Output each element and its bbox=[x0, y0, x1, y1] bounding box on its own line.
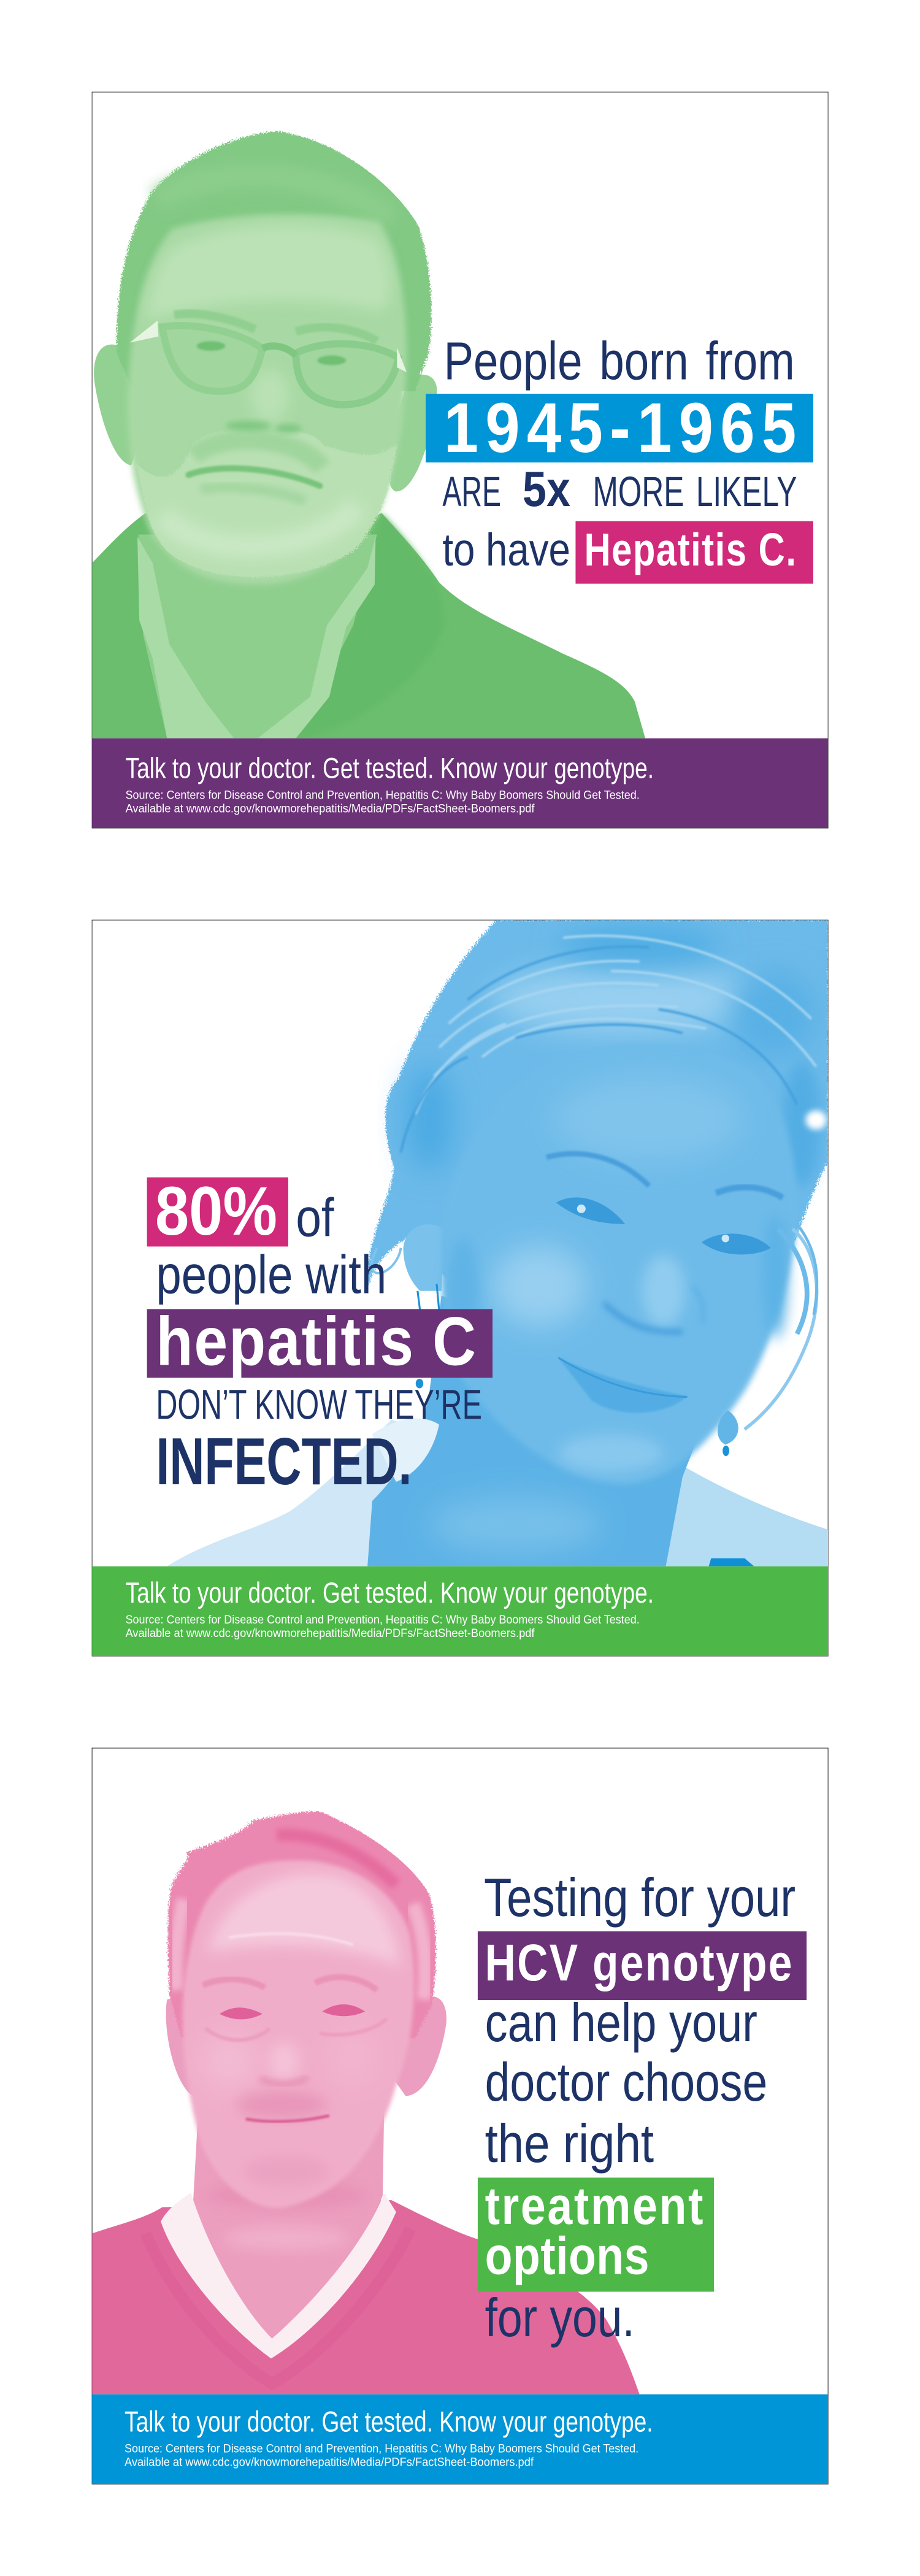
banner: purple call to action: Source: Centers for Disease Control and Prevention, Hepatitis C: Why Baby Boomers Should Get Tested. bbox=[126, 789, 640, 802]
headline text: 5x bbox=[523, 462, 570, 517]
pink highlight: Hepatitis C.: Hepatitis C. bbox=[584, 525, 796, 576]
banner: purple call to action bbox=[92, 738, 828, 828]
banner: purple call to action: Available at www.cdc.gov/knowmorehepatitis/Media/PDFs/FactSheet-Boomers.pdf bbox=[126, 802, 535, 815]
headline text: people with bbox=[156, 1244, 386, 1305]
headline text: People born from bbox=[444, 332, 795, 391]
headline text: of bbox=[296, 1187, 334, 1248]
headline text bbox=[426, 332, 813, 584]
headline text bbox=[478, 1867, 807, 2348]
blue highlight: 1945-1965: 1945-1965 bbox=[444, 388, 796, 467]
headline text bbox=[147, 1173, 493, 1499]
purple highlight: HCV genotype: HCV genotype bbox=[485, 1934, 792, 1992]
headline text: the right bbox=[485, 2113, 654, 2174]
panel: born 1945-1965 bbox=[92, 92, 828, 828]
headline text: doctor choose bbox=[485, 2052, 767, 2112]
banner: blue call to action: Talk to your doctor. Get tested. Know your genotype. bbox=[125, 2405, 653, 2438]
panel: 80 percent unaware bbox=[92, 920, 828, 1656]
banner: green call to action: Available at www.cdc.gov/knowmorehepatitis/Media/PDFs/FactSheet-Boomers.pdf bbox=[126, 1627, 535, 1640]
pink highlight: 80%: 80% bbox=[155, 1173, 277, 1249]
green highlight: treatment options: options bbox=[485, 2226, 649, 2285]
green highlight: treatment options: treatment bbox=[485, 2175, 703, 2235]
headline text: INFECTED. bbox=[156, 1424, 412, 1499]
green highlight: treatment options bbox=[478, 2175, 714, 2291]
headline text: ARE bbox=[442, 468, 501, 515]
panel: genotype testing bbox=[92, 1748, 828, 2484]
headline text: MORE LIKELY bbox=[592, 468, 797, 515]
banner: green call to action: Source: Centers for Disease Control and Prevention, Hepatitis C: Why Baby Boomers Should Get Tested. bbox=[126, 1613, 640, 1627]
banner: blue call to action: Source: Centers for Disease Control and Prevention, Hepatitis C: Why Baby Boomers Should Get Tested. bbox=[125, 2442, 638, 2456]
purple highlight: hepatitis C: hepatitis C bbox=[156, 1303, 476, 1380]
portrait: man with glasses in green bbox=[92, 131, 645, 738]
headline text: to have bbox=[442, 524, 570, 575]
portrait: man in pink bbox=[92, 1812, 640, 2394]
banner: purple call to action: Talk to your doctor. Get tested. Know your genotype. bbox=[126, 752, 654, 784]
banner: green call to action: Talk to your doctor. Get tested. Know your genotype. bbox=[126, 1577, 654, 1609]
portrait: woman in blue bbox=[167, 920, 828, 1566]
banner: blue call to action: Available at www.cdc.gov/knowmorehepatitis/Media/PDFs/FactSheet-Boomers.pdf bbox=[125, 2456, 534, 2469]
headline text: for you. bbox=[485, 2287, 635, 2348]
headline text: DON’T KNOW THEY’RE bbox=[156, 1381, 482, 1428]
headline text: Testing for your bbox=[484, 1867, 795, 1928]
banner: green call to action bbox=[92, 1566, 828, 1656]
headline text: can help your bbox=[485, 1992, 757, 2053]
banner: blue call to action bbox=[92, 2394, 828, 2484]
